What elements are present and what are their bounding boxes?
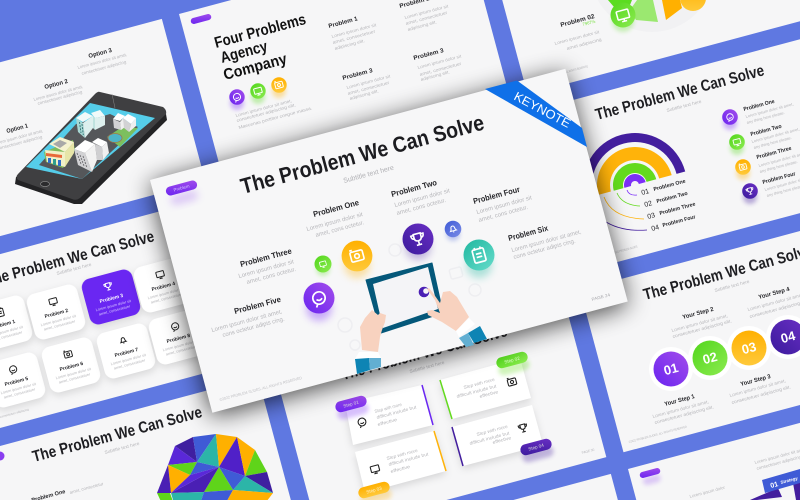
- block: problem six: cons octetur adipis cing.: [513, 238, 577, 261]
- legend: Problem Four: [662, 214, 697, 229]
- card: problem 7: [95, 322, 157, 380]
- chart: low poly sphere: [157, 434, 273, 500]
- panel: main slide: [150, 69, 628, 413]
- block: problem three: amet, cons octetur.: [246, 267, 297, 286]
- card: step 03: Step with more: [386, 448, 419, 461]
- card: step 01: effective: [377, 417, 398, 427]
- legend: 04: [651, 224, 660, 233]
- card: step 04: difficult include but: [469, 430, 511, 446]
- heading: slide title: The Problem We Can Solve: [594, 62, 766, 124]
- list labels: [743, 99, 800, 198]
- icon: orange: [735, 159, 751, 180]
- panel: step cards slide: [275, 295, 606, 500]
- pill: step 01: Step 01: [343, 400, 360, 409]
- illustration: phone with isometric city: [15, 92, 167, 204]
- block: problem 3: Problem 3: [342, 68, 374, 82]
- text: four problems body: consectetuer adipiscing elit.: [236, 102, 296, 123]
- icon: orange camera: [271, 77, 287, 98]
- heading: four problems agency company: Agency: [219, 38, 270, 67]
- panel: pie chart slide: [484, 0, 800, 94]
- icon: small green: [314, 256, 332, 276]
- block: problem five: cons octetur adipis cing.: [222, 316, 286, 339]
- card: problem 4: amet, consectetuer: [151, 292, 183, 305]
- heading: option 1: Option 1: [6, 123, 29, 135]
- block: your step 1: Your Step 1: [664, 394, 696, 408]
- step circle 03: 03: [740, 339, 758, 357]
- card: step 02: [440, 358, 531, 419]
- card: problem 5: [0, 351, 47, 409]
- block: your step 2: Your Step 2: [682, 307, 715, 321]
- card: problem 7: Lorem ipsum dolor sit: [110, 353, 147, 366]
- tag dot: [0, 452, 4, 460]
- card: problem 6: [40, 336, 102, 394]
- block: problem 1: Problem 1: [328, 16, 359, 30]
- block: problem 3 second: Lorem ipsum dolor sit: [417, 53, 463, 70]
- block: your step 3: Your Step 3: [740, 374, 772, 388]
- list labels: Lorem ipsum dolor sit amet,: [751, 126, 800, 144]
- panel: low poly slide: [0, 377, 301, 500]
- step circle 01: [649, 347, 693, 391]
- card: problem 3 highlighted: Problem 3: [99, 293, 124, 305]
- block: problem one: [306, 198, 365, 239]
- card: problem 8: amet, consectetuer: [166, 344, 198, 357]
- card: problem 6: amet, consectetuer: [59, 372, 91, 385]
- panel: lower slide corner: [323, 474, 654, 500]
- footer: ©2022 PROBLEM SLIDES. ALL RIGHTS RESERVED: [539, 64, 589, 81]
- text: partial item: amet, consectetur: [69, 481, 104, 495]
- list labels: Problem One: [743, 99, 775, 113]
- block: problem three: Problem Three: [239, 246, 293, 269]
- block: problem 3: Lorem ipsum dolor sit: [346, 73, 392, 90]
- text: four problems body: Lorem ipsum dolor sit amet,: [235, 98, 292, 118]
- block: problem three: [238, 246, 297, 286]
- heading: option 2: Option 2: [44, 79, 69, 91]
- heading: four problems agency company: Four Problems: [213, 11, 308, 52]
- card: step 01: difficult include but: [376, 404, 418, 420]
- block: problem 2: amet, consectetuer: [405, 10, 448, 26]
- block: problem two: Lorem ipsum dolor sit: [394, 188, 451, 209]
- block: your step 4: Your Step 4: [758, 287, 791, 301]
- card: problem 2: Lorem ipsum dolor sit: [40, 314, 77, 327]
- card: problem 8: [147, 308, 209, 366]
- list labels: Problem Four: [762, 171, 797, 186]
- card: problem 4: Problem 4: [151, 281, 176, 293]
- page number: PAGE 24: [591, 292, 611, 302]
- panel: numbered steps slide: [580, 213, 800, 452]
- card: step 04: Step with more: [476, 424, 509, 437]
- block: problem five: Problem Five: [233, 295, 282, 316]
- chart: leader arcs: [603, 190, 647, 230]
- card: step 04: [452, 405, 543, 466]
- card: problem 8: Lorem ipsum dolor sit: [162, 339, 199, 352]
- list labels: Problem Two: [750, 124, 783, 138]
- card: step 02: difficult include but: [456, 383, 498, 399]
- icon: small blue bell: [445, 221, 461, 241]
- subtitle: Subtitle text here: [714, 279, 750, 293]
- block: problem five: Lorem ipsum dolor sit amet,: [211, 309, 283, 334]
- list labels: any thing here please.: [753, 135, 792, 150]
- tag pill: problem: [165, 180, 201, 207]
- block: problem 1: [328, 16, 378, 51]
- legend: Problem One: [653, 179, 686, 193]
- text: option 2 body: Lorem ipsum dolor sit amet,: [33, 84, 84, 102]
- icon: dark purple: [742, 183, 758, 204]
- step circle 04: [766, 315, 800, 359]
- subtitle: Subtitle text here: [343, 165, 395, 185]
- subtitle: Subtitle text here: [104, 441, 140, 455]
- panel: feature cards slide: [0, 198, 253, 437]
- panel: hidden middle slide: [227, 116, 558, 355]
- block: your step 3: consectetuer adipiscing elit.: [731, 384, 791, 405]
- card: problem 2: [25, 283, 87, 341]
- block: problem four: Lorem ipsum dolor sit: [476, 195, 533, 216]
- block: problem 1: amet, consectetuer: [332, 29, 376, 45]
- card: problem 3 highlighted: [80, 268, 142, 326]
- icon: orange camera: [342, 241, 372, 278]
- card: step 01: [345, 385, 433, 445]
- list labels: Problem Three: [756, 146, 792, 161]
- text: four problems body: Maecenas porttitor congue massa.: [238, 105, 313, 130]
- heading: slide title: The Problem We Can Solve: [340, 323, 509, 384]
- legend: 03: [647, 212, 656, 221]
- title: The Problem We Can Solve: [238, 110, 487, 199]
- block: your step 2: Lorem ipsum dolor sit amet,: [671, 313, 728, 333]
- block: problem 1: adipiscing elit.: [334, 38, 365, 51]
- subtitle: Subtitle text here: [666, 99, 702, 113]
- footer: ©2022 PROBLEM SLIDES. ALL RIGHTS RESERVED: [219, 376, 303, 402]
- block: problem 02: amet adipiscing: [566, 37, 603, 51]
- list labels: any thing here please.: [759, 159, 798, 174]
- text: option 3 body: consectetuer adipiscing: [81, 59, 127, 76]
- pill: step 02: Step 02: [504, 356, 521, 365]
- list labels: Lorem ipsum dolor sit amet,: [745, 101, 794, 119]
- block: problem 3 second: [413, 48, 463, 82]
- block: problem four: [472, 185, 533, 224]
- block: your step 2: [671, 307, 732, 339]
- block: problem 2: [399, 0, 450, 32]
- text: option 3 body: Lorem ipsum dolor sit amet,: [77, 52, 128, 70]
- pill: step 03: Step 03: [366, 486, 383, 495]
- text: intro: [689, 446, 800, 499]
- chart: pie with segments: [590, 0, 714, 32]
- footer: consectetuer adipiscing: [0, 407, 30, 419]
- block: problem six: [507, 224, 582, 261]
- text: four problems body: [235, 98, 313, 130]
- block: problem four: amet, cons octetur.: [478, 205, 529, 224]
- chart: concentric half rings: [571, 121, 685, 198]
- step circle 04: 04: [779, 328, 798, 346]
- card: step 03: [355, 431, 446, 493]
- block: problem 3: amet, consectetuer: [347, 80, 390, 96]
- card: step 02: Step with more: [463, 377, 496, 390]
- card: step 04: effective: [492, 435, 512, 445]
- block: your step 4: [747, 287, 800, 319]
- block: problem one: Problem One: [312, 198, 360, 219]
- block: problem two: [390, 178, 451, 217]
- ghost icons behind tablet: [338, 244, 481, 350]
- step circle 03: [727, 326, 771, 370]
- panel: four problems agency slide: [179, 0, 510, 176]
- heading: option 3: Option 3: [88, 48, 113, 60]
- card: problem 3 highlighted: amet, consectetuer: [99, 304, 131, 317]
- card: problem 4: Lorem ipsum dolor sit: [147, 287, 184, 300]
- block: problem five: [211, 295, 286, 339]
- pill: step 04: Step 04: [528, 443, 545, 452]
- strategy block: Strategy: [780, 475, 799, 485]
- card: problem 6: Problem 6: [59, 361, 84, 373]
- panel: strategy slide: [628, 392, 800, 500]
- icon: teal note: [464, 240, 494, 278]
- block: problem 02: [554, 13, 603, 51]
- block: problem three: Lorem ipsum dolor sit: [238, 259, 295, 280]
- card: problem 5: Lorem ipsum dolor sit: [0, 382, 37, 395]
- block: your step 3: [729, 374, 791, 405]
- card: problem 4: [132, 256, 194, 314]
- text: partial item: [31, 481, 104, 500]
- panel: isometric phone options slide: [0, 19, 205, 258]
- icon: green monitor: [250, 83, 266, 104]
- heading: slide title: The Problem We Can Solve: [31, 404, 204, 466]
- text: option 2 body: consectetuer adipiscing: [37, 89, 83, 106]
- card: problem 5: amet, consectetuer: [4, 387, 36, 400]
- card: problem 8: Problem 8: [166, 333, 191, 345]
- text: option 3 body: [77, 52, 128, 76]
- main slide shadow: [150, 73, 628, 417]
- block: your step 1: consectetuer adipiscing elit.: [654, 404, 714, 425]
- card: problem 7: amet, consectetuer: [114, 358, 146, 371]
- illustration: hands holding tablet: [355, 263, 487, 374]
- step circle 01: 01: [662, 360, 680, 378]
- step circle 02: [688, 336, 732, 380]
- block: problem 2: Lorem ipsum dolor sit: [404, 3, 450, 20]
- card: problem 5: Problem 5: [4, 376, 29, 388]
- page number: PAGE 30: [581, 448, 595, 455]
- block: your step 3: Lorem ipsum dolor sit amet,: [729, 378, 786, 398]
- tag pill: [639, 467, 663, 486]
- strategy block: [750, 469, 800, 500]
- icon: green: [729, 134, 745, 155]
- icon: purple chat: [229, 89, 245, 110]
- tag pill: problem: Problem: [173, 183, 190, 193]
- icon: purple: [722, 109, 738, 130]
- block: problem six: Lorem ipsum dolor sit amet,: [511, 229, 582, 254]
- icon: dark purple trophy: [402, 224, 434, 260]
- card: problem 2: amet, consectetuer: [44, 319, 76, 332]
- block: problem one: amet, cons octetur.: [315, 220, 365, 239]
- card: problem 6: Lorem ipsum dolor sit: [55, 367, 92, 380]
- legend: 02: [644, 200, 653, 209]
- subtitle: Subtitle text here: [409, 360, 445, 374]
- block: problem 3 second: adipiscing elit.: [420, 69, 450, 82]
- legend: 01: [641, 188, 650, 197]
- card: step 02: effective: [479, 389, 499, 399]
- pill: step 01: [334, 395, 370, 421]
- step circle 02: 02: [701, 349, 719, 367]
- block: problem four: Problem Four: [472, 185, 521, 206]
- block: problem 3: adipiscing elit.: [349, 88, 379, 101]
- block: problem 02: 7967%: [582, 19, 596, 27]
- legend: Problem Three: [659, 202, 696, 217]
- block: problem 3 second: amet, consectetuer: [419, 61, 462, 77]
- card: step 03: effective: [390, 464, 411, 474]
- list labels: any thing here please.: [746, 110, 785, 125]
- block: problem 02: Lorem ipsum dolor sit: [554, 29, 601, 46]
- ribbon: keynote: [485, 80, 587, 147]
- block: problem 02: Problem 02: [560, 13, 596, 29]
- block: your step 2: consectetuer adipiscing elit.: [672, 318, 732, 339]
- block: problem 1: Lorem ipsum dolor sit: [331, 22, 378, 39]
- panel: rainbow chart slide: [532, 34, 800, 273]
- tag pill: [190, 13, 212, 25]
- block: problem 3: [342, 68, 392, 101]
- card: problem 1: [0, 294, 34, 352]
- block: problem two: amet, cons octetur.: [396, 198, 447, 217]
- block: problem two: Problem Two: [390, 178, 438, 199]
- legend: [641, 179, 697, 233]
- card: step 01: Step with more: [374, 402, 403, 414]
- block: problem 3 second: Problem 3: [413, 48, 445, 62]
- footer: ©2022 PROBLEM SLIDES.: [612, 244, 638, 255]
- strategy block: 01: [770, 481, 779, 490]
- pill: step 04: [519, 438, 555, 464]
- card: problem 7: Problem 7: [114, 347, 139, 359]
- pill: step 02: [495, 351, 531, 377]
- subtitle: Subtitle text here: [56, 262, 92, 276]
- block: your step 1: [652, 394, 714, 425]
- pill: step 03: [357, 481, 393, 500]
- legend: Problem Two: [656, 191, 689, 205]
- block: problem 2: adipiscing elit.: [407, 19, 437, 32]
- block: problem one: Lorem ipsum dolor sit: [306, 212, 364, 233]
- heading: four problems agency company: [213, 11, 308, 84]
- card: step 03: difficult include but: [388, 451, 430, 467]
- card: problem 2: Problem 2: [44, 308, 69, 320]
- heading: four problems agency company: Company: [222, 51, 289, 84]
- footer: ©2022 PROBLEM SLIDES. ALL RIGHTS RESERVED: [628, 424, 688, 444]
- ribbon: keynote: KEYNOTE: [512, 89, 573, 131]
- block: your step 1: Lorem ipsum dolor sit amet,: [652, 399, 709, 419]
- icon: purple chat: [304, 282, 334, 321]
- text: intro: Lorem ipsum dolor: [689, 485, 726, 499]
- card: problem 3 highlighted: Lorem ipsum dolor sit: [95, 299, 132, 312]
- block: problem six: Problem Six: [507, 224, 550, 243]
